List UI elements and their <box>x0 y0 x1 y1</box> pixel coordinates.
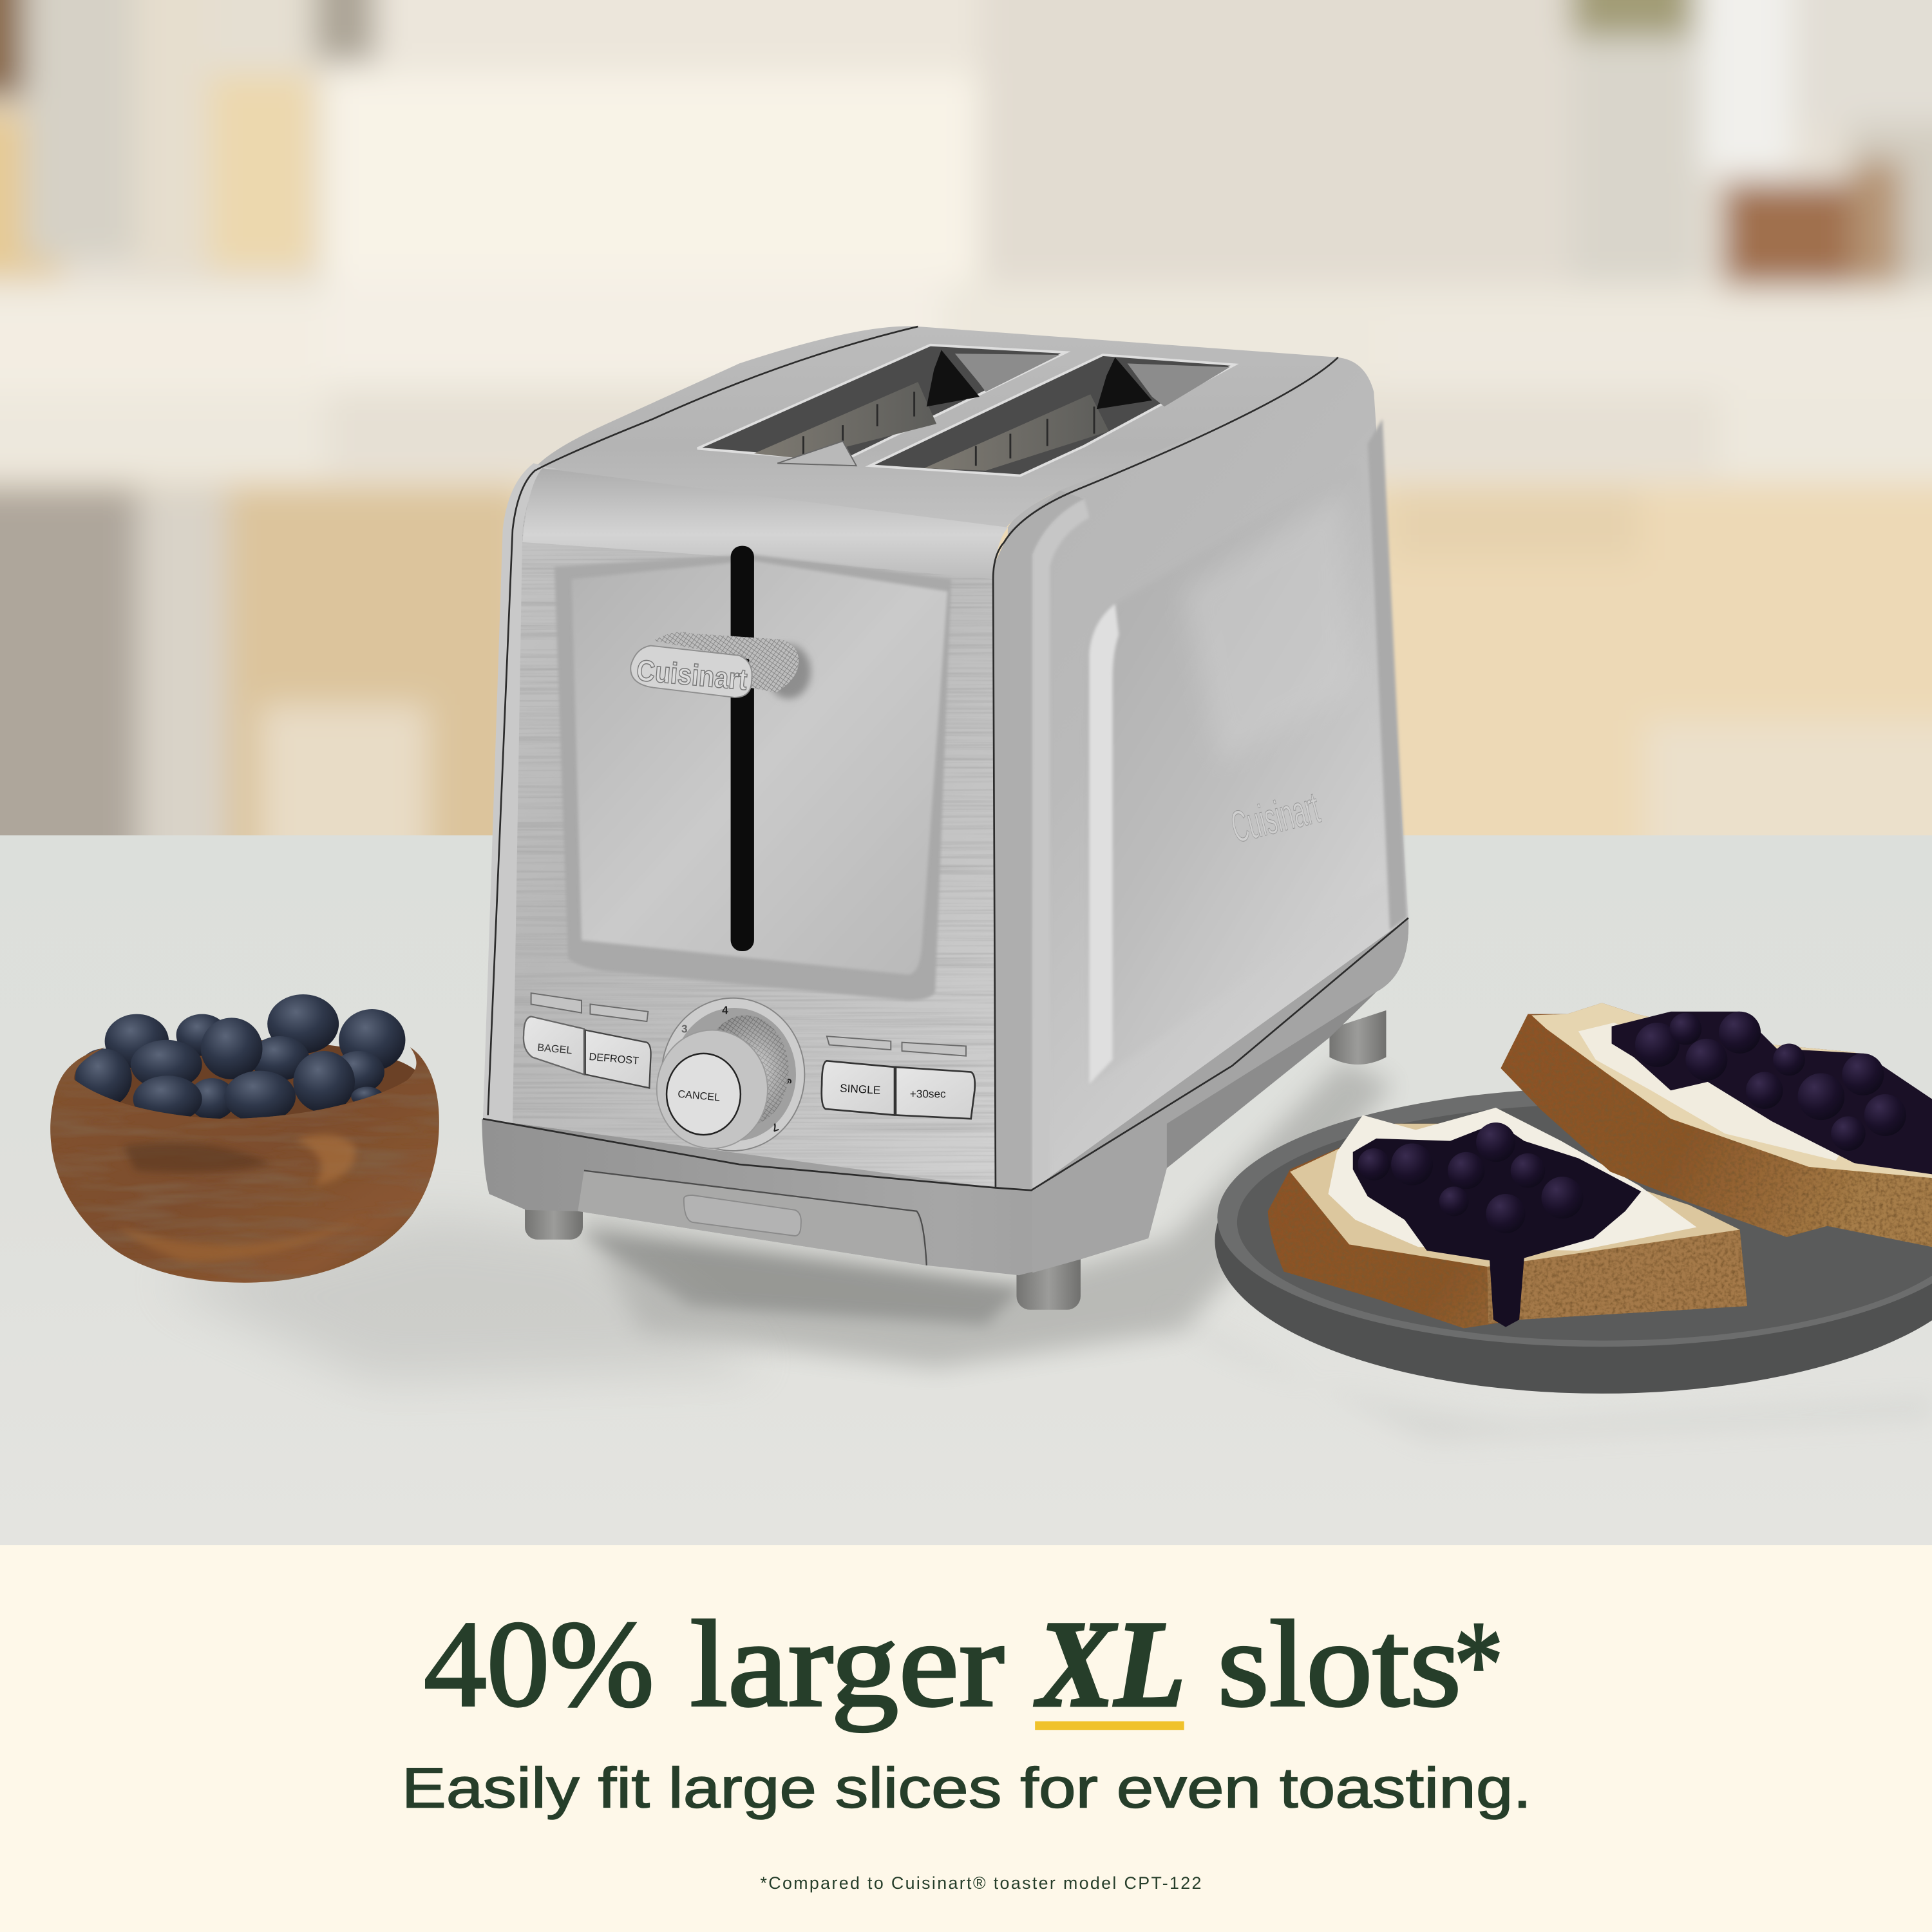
dial numbers: 7 <box>770 1121 781 1135</box>
heading <box>424 1596 1503 1732</box>
blueberries <box>75 994 405 1122</box>
lever slot <box>731 546 754 951</box>
single button: SINGLE <box>840 1081 881 1097</box>
defrost button: DEFROST <box>589 1051 639 1067</box>
yellow underline <box>1035 1721 1184 1730</box>
heading: slots <box>1217 1596 1461 1732</box>
top surface <box>530 327 1338 530</box>
side face <box>993 357 1408 1190</box>
back toast <box>1501 1003 1932 1247</box>
front face <box>483 463 1008 1188</box>
front jam <box>1353 1122 1641 1327</box>
bagel button <box>524 1016 584 1074</box>
side recess panel <box>1088 462 1386 1084</box>
pot on shelf <box>1723 160 1901 303</box>
heading: * <box>1454 1596 1503 1732</box>
front ricotta <box>1328 1108 1697 1251</box>
back jam <box>1612 1012 1932 1174</box>
top slots <box>697 345 1235 476</box>
footnote: *Compared to Cuisinart® toaster model CPT-122 <box>760 1873 1201 1893</box>
crumb tray <box>578 1171 927 1265</box>
side logo: Cuisinart <box>1226 782 1324 852</box>
bagel button: BAGEL <box>537 1042 573 1056</box>
wood highlights <box>117 1135 370 1262</box>
lever shadow <box>766 645 811 699</box>
wall and left shelf objects <box>0 0 1932 296</box>
lever <box>630 632 799 697</box>
front top shoulder <box>522 468 1008 579</box>
bowl body <box>50 1047 439 1283</box>
dial numbers: 3 <box>681 1022 688 1035</box>
defrost button <box>585 1030 651 1088</box>
cabinets <box>0 469 1932 836</box>
heading: 40% <box>424 1596 654 1732</box>
plate with toast <box>1215 1003 1932 1394</box>
dial numbers: 5 <box>766 1032 779 1046</box>
heading: XL <box>1034 1596 1186 1732</box>
dial numbers: 6 <box>781 1078 794 1084</box>
countertop <box>0 835 1932 1545</box>
dial numbers <box>681 1004 794 1135</box>
cancel button: CANCEL <box>677 1088 721 1103</box>
cancel button <box>667 1054 741 1135</box>
toaster <box>482 327 1408 1310</box>
bowl of blueberries <box>50 994 439 1283</box>
seam lines <box>483 327 1408 1190</box>
base underside side band <box>1031 918 1408 1273</box>
indicator lights <box>531 993 966 1056</box>
blurred kitchen background <box>0 0 1932 836</box>
back ricotta <box>1578 1023 1848 1160</box>
left front foot <box>525 1195 583 1240</box>
rear foot <box>1329 1010 1386 1065</box>
bottom caption panel <box>0 1545 1932 1932</box>
browning dial <box>657 998 804 1151</box>
front toast <box>1268 1108 1747 1328</box>
front toast right crust <box>1487 1229 1747 1323</box>
base <box>482 918 1408 1275</box>
lever logo: Cuisinart <box>635 653 748 696</box>
shelf counter band <box>0 257 1932 401</box>
back toast crumb <box>1531 1003 1932 1178</box>
plate <box>1215 1222 1932 1394</box>
front recess panel <box>554 554 951 1001</box>
side highlights <box>1089 604 1119 1084</box>
right front foot <box>1016 1244 1081 1310</box>
front edge strip <box>483 463 548 1124</box>
heading: larger <box>690 1596 1004 1732</box>
30 second button: +30sec <box>910 1088 946 1101</box>
bowl inner wall <box>63 1040 422 1124</box>
single button <box>822 1061 895 1115</box>
subheading: Easily fit large slices for even toasting. <box>402 1756 1531 1820</box>
counter shadows <box>160 1059 1932 1442</box>
dial numbers: 4 <box>722 1004 728 1017</box>
front toast crumb <box>1290 1124 1740 1267</box>
30 second button <box>896 1067 975 1119</box>
